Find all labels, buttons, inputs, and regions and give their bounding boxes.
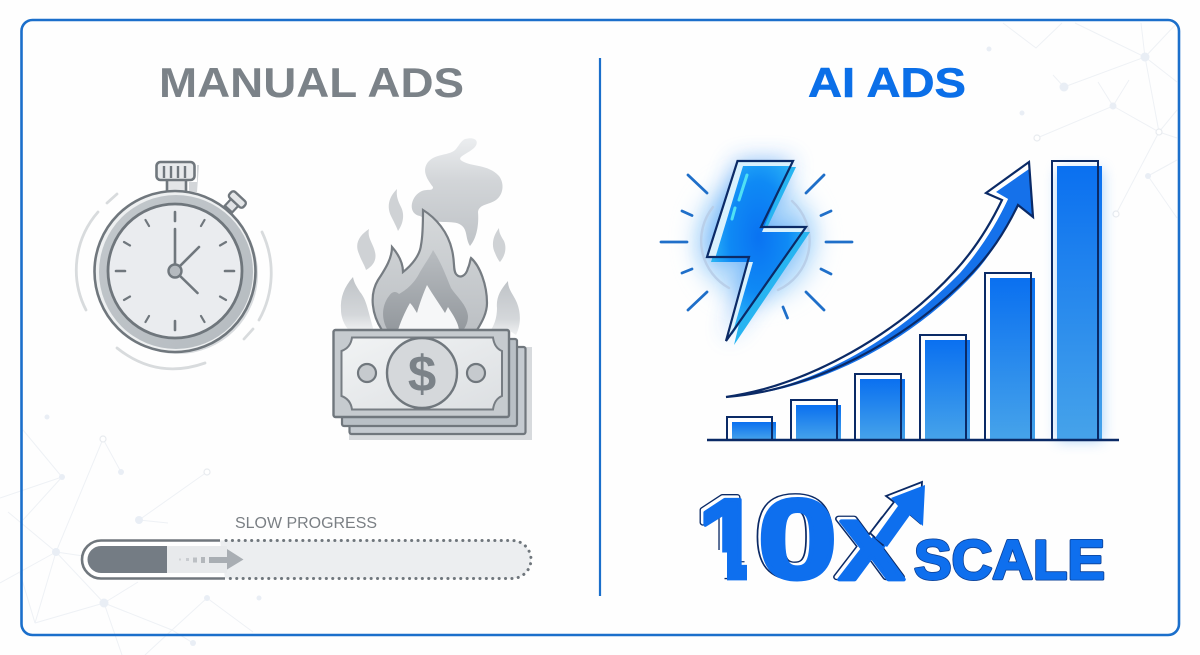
- big number: 1: [698, 476, 761, 604]
- label: slow progress: SLOW PROGRESS: [235, 515, 377, 532]
- baseline: [707, 439, 1119, 441]
- side flames: [341, 277, 520, 335]
- word: scale: SCALE: [914, 528, 1105, 591]
- panel: manual ads: [76, 59, 532, 578]
- bar 3: [855, 374, 905, 440]
- bar 2: [791, 400, 841, 440]
- big number: X: [838, 504, 904, 598]
- heading: manual ads: MANUAL ADS: [159, 59, 464, 106]
- center divider: [599, 58, 601, 596]
- growth arrow: [726, 162, 1034, 397]
- big number: 0: [755, 474, 835, 601]
- dollar sign: $: [408, 345, 436, 402]
- big number: X: [836, 501, 902, 595]
- big number: 1: [695, 474, 758, 601]
- callout: 10x scale: [700, 480, 1104, 582]
- 10x arrow: [870, 482, 925, 547]
- word: scale: SCALE: [914, 528, 1105, 591]
- big number: 1: [695, 474, 758, 601]
- bar 1: [727, 417, 776, 440]
- progress arrow: [179, 549, 244, 570]
- big number: [700, 493, 906, 582]
- icon: lightning bolt: [661, 161, 852, 345]
- smoke wisps: [357, 189, 505, 270]
- stacked bills: [349, 347, 532, 440]
- big number: X: [836, 501, 902, 595]
- big number: 0: [758, 476, 838, 604]
- icon: stopwatch: [76, 162, 271, 369]
- progress bar: [82, 540, 531, 578]
- heading: AI ads: AI ADS: [808, 59, 966, 106]
- chart: growth bars: [707, 161, 1119, 440]
- bar 6: [1052, 161, 1102, 440]
- smoke: [412, 138, 503, 246]
- bar 5: [985, 273, 1035, 440]
- icon: burning money: [334, 138, 532, 440]
- big number: 0: [755, 474, 835, 601]
- main flame: [373, 210, 487, 330]
- panel: AI ads: [661, 59, 1119, 604]
- bar 4: [920, 335, 970, 440]
